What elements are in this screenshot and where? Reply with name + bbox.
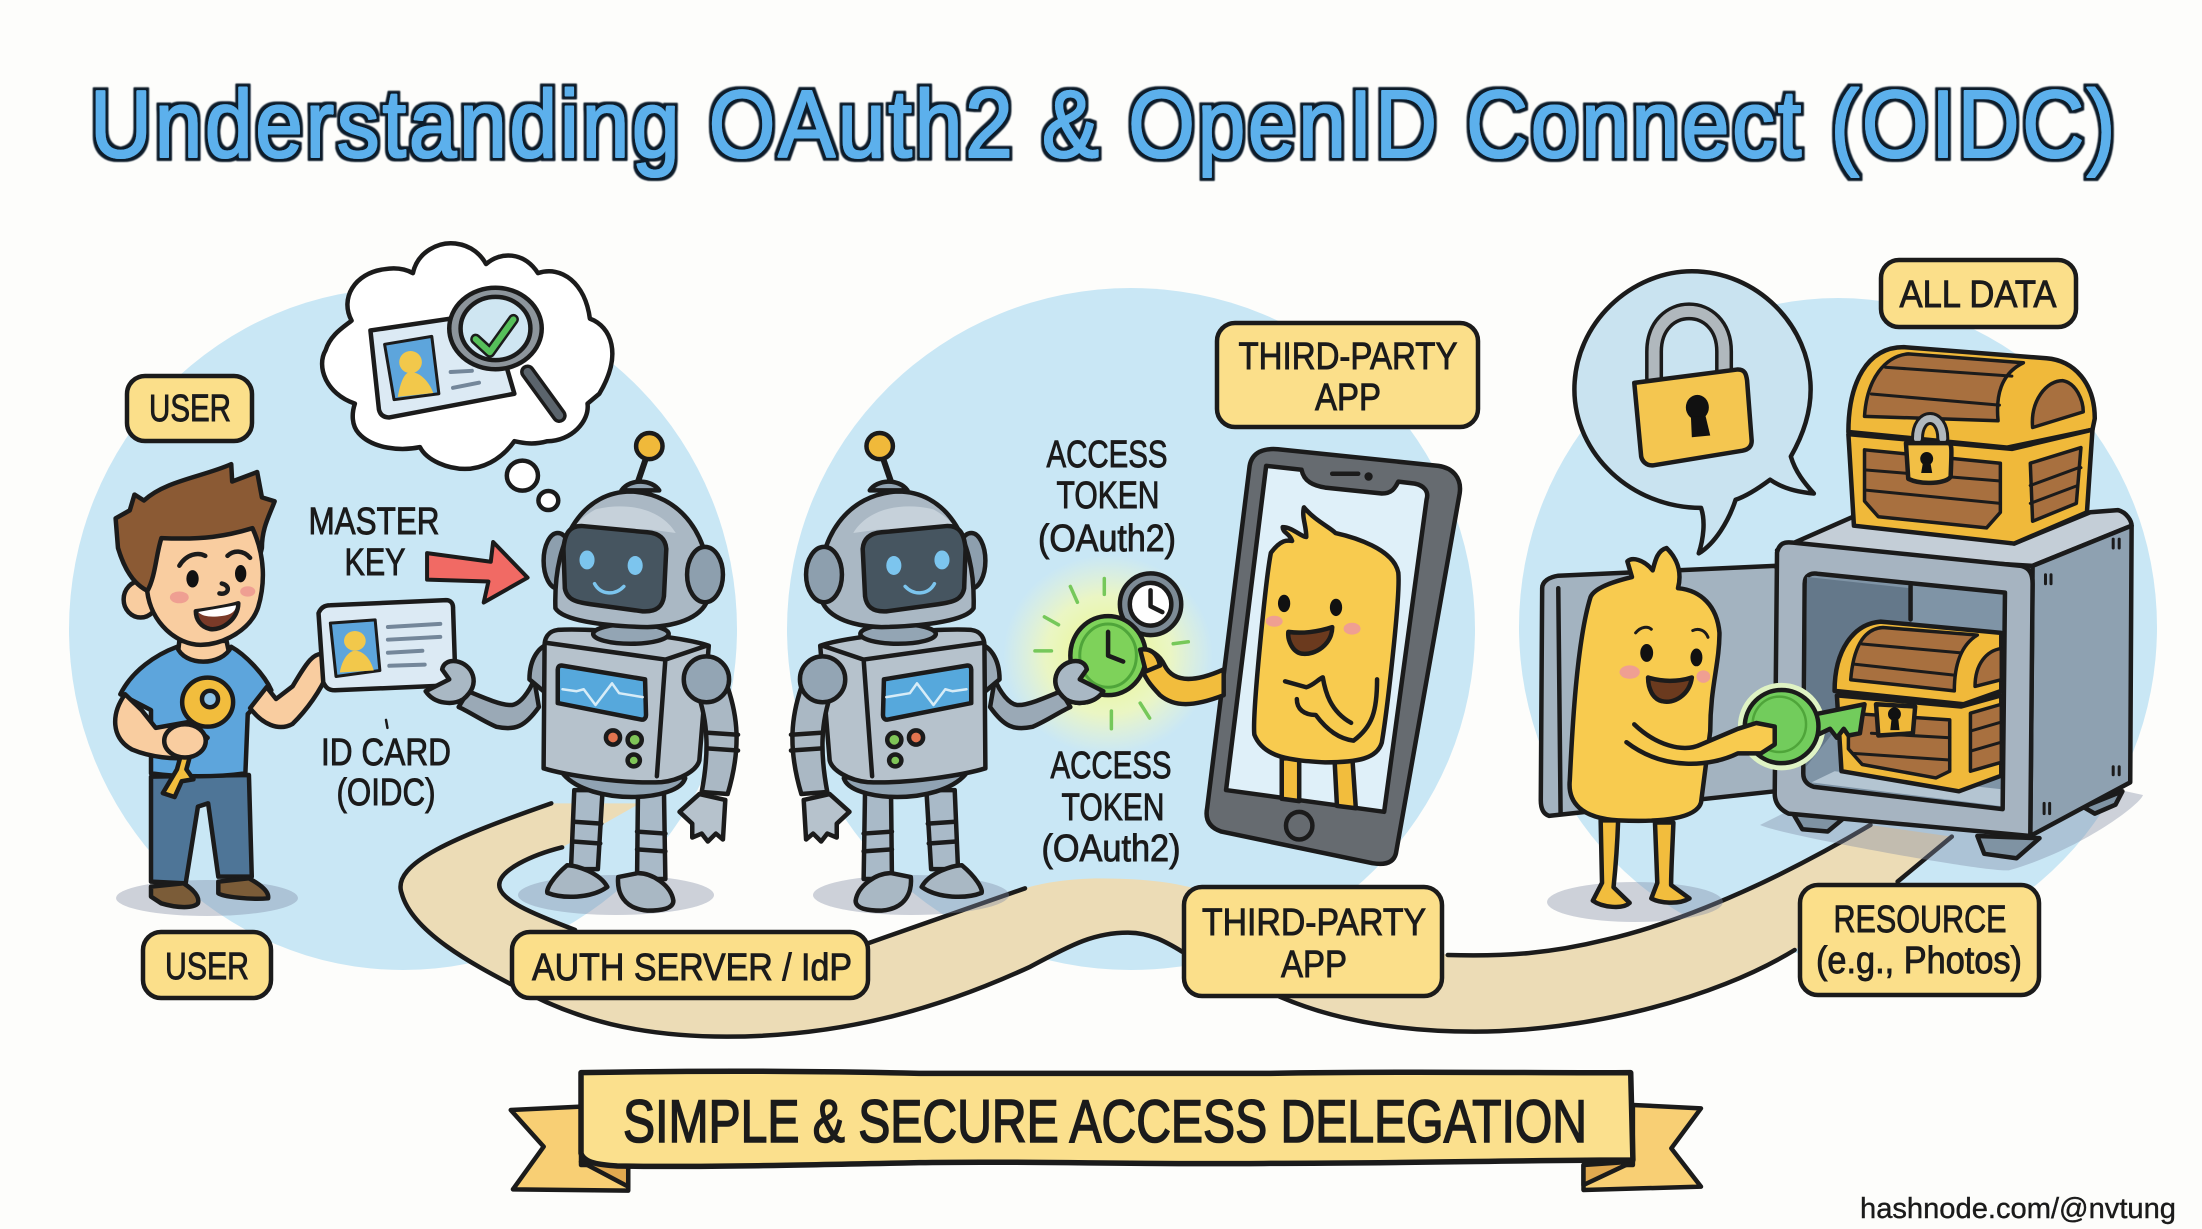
label: USER bottom: USER bbox=[165, 946, 249, 988]
app character arm to token bbox=[1141, 651, 1224, 704]
user legs and shoes bbox=[151, 775, 268, 907]
user character bbox=[115, 464, 455, 907]
safe feet bbox=[1793, 791, 2122, 858]
label: resource bbox=[1800, 885, 2039, 995]
label: master key: MASTER bbox=[308, 501, 440, 543]
winding path bbox=[401, 803, 1952, 1037]
banner: SIMPLE & SECURE ACCESS DELEGATION bbox=[623, 1088, 1587, 1155]
app character body bbox=[1254, 507, 1399, 762]
ground shadows bbox=[116, 790, 2143, 922]
label: third-party app top bbox=[1217, 323, 1478, 427]
phone with app character bbox=[1141, 449, 1460, 864]
label: third-party app bottom bbox=[1184, 887, 1442, 996]
green access token and clock bbox=[1035, 573, 1188, 729]
banner bbox=[511, 1071, 1701, 1191]
safe door bbox=[1541, 566, 1784, 816]
app character legs bbox=[1282, 758, 1299, 801]
label: master key bbox=[308, 501, 440, 584]
phone body bbox=[1207, 449, 1460, 864]
label: access token bottom: TOKEN bbox=[1062, 787, 1164, 829]
label: access token bottom bbox=[1042, 745, 1180, 870]
token glow bbox=[1003, 555, 1213, 755]
robot: auth server bbox=[426, 433, 738, 911]
character legs bbox=[1593, 820, 1630, 907]
speech bubble with padlock bbox=[1574, 271, 1814, 553]
ID card bbox=[319, 600, 455, 728]
thought bubble with ID check bbox=[322, 243, 612, 510]
background circle: app bbox=[787, 288, 1475, 970]
user upper body and head bbox=[115, 464, 328, 797]
label: access token top: TOKEN bbox=[1056, 475, 1160, 517]
label: ID card OIDC bbox=[321, 732, 451, 814]
label: third-party app bottom: APP bbox=[1281, 944, 1347, 986]
treasure chest inside safe bbox=[1835, 622, 2001, 791]
label: all data: ALL DATA bbox=[1900, 274, 2057, 316]
label: USER top: USER bbox=[149, 388, 231, 430]
character body bbox=[1570, 548, 1719, 821]
background circle: resource bbox=[1519, 298, 2157, 956]
safe cabinet bbox=[1777, 510, 2132, 566]
label: auth server bbox=[512, 932, 868, 998]
label: master key: KEY bbox=[344, 542, 406, 584]
label: ID card OIDC: ID CARD bbox=[321, 732, 451, 774]
label: access token top: (OAuth2) bbox=[1038, 518, 1176, 560]
label: access token top bbox=[1038, 434, 1176, 560]
label: auth server: AUTH SERVER / IdP bbox=[532, 947, 852, 989]
background circle: user and auth server bbox=[69, 288, 737, 970]
label: USER top bbox=[127, 376, 252, 441]
label: ID card OIDC: (OIDC) bbox=[336, 772, 436, 814]
label: third-party app top: THIRD-PARTY bbox=[1238, 336, 1458, 378]
resource owner character with green key bbox=[1570, 548, 1865, 907]
credit: hashnode.com/@nvtung bbox=[1860, 1193, 2176, 1225]
character arm bbox=[1626, 723, 1775, 764]
label: third-party app bottom: THIRD-PARTY bbox=[1202, 902, 1426, 944]
label: third-party app top: APP bbox=[1315, 377, 1381, 419]
label: all data bbox=[1881, 260, 2076, 327]
label: resource: (e.g., Photos) bbox=[1816, 940, 2022, 982]
red arrow bbox=[427, 542, 528, 603]
robot: auth server handing token bbox=[791, 433, 1103, 911]
label: access token bottom: (OAuth2) bbox=[1042, 828, 1180, 870]
green key bbox=[1738, 683, 1825, 770]
safe bbox=[1541, 510, 2132, 858]
treasure chest on top of safe bbox=[1848, 347, 2095, 544]
label: USER bottom bbox=[143, 932, 271, 998]
label: access token top: ACCESS bbox=[1046, 434, 1168, 476]
label: resource: RESOURCE bbox=[1834, 899, 2006, 941]
label: access token bottom: ACCESS bbox=[1050, 745, 1172, 787]
